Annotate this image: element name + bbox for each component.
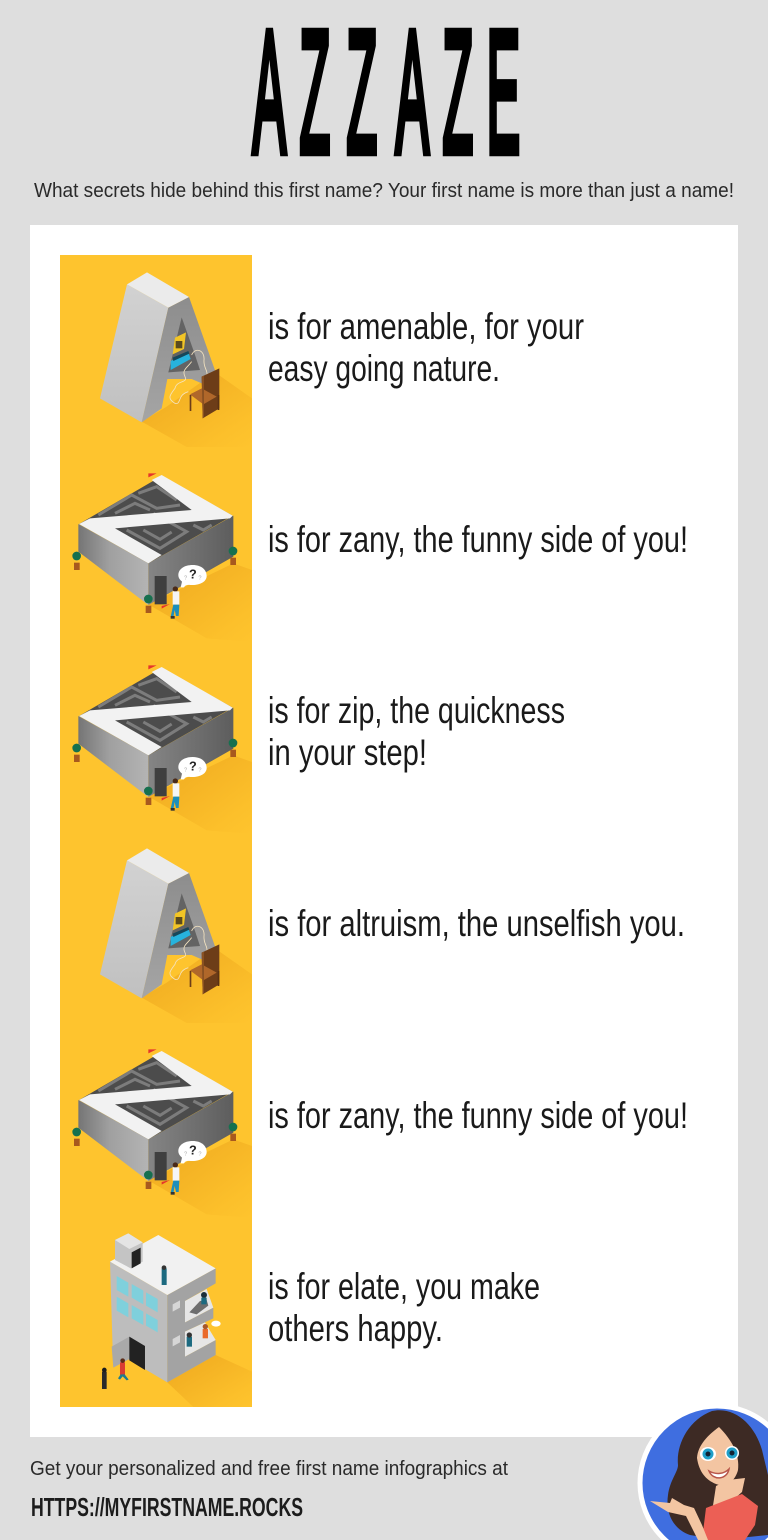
icon: isometric letter A with desk and chair [100,848,252,1023]
text: Z is for zip: is for zip, the quickness [268,690,565,731]
text: E is for elate [268,1266,540,1349]
text: A is for amenable [268,306,584,389]
yellow illustration strip [60,255,252,1407]
icon: isometric letter A with desk and chair [100,272,252,447]
text: A is for amenable: easy going nature. [268,348,500,389]
icon: isometric letter Z maze [72,1049,252,1218]
panel: white content card [30,225,738,1437]
subtitle: What secrets hide behind this first name? Your first name is more than just a name! [34,180,734,202]
icon: isometric letter E office building [102,1233,252,1407]
icon: isometric letter Z maze [72,665,252,834]
text: Z is for zip [268,690,565,773]
text: Z is for zip: in your step! [268,732,427,773]
footer URL: HTTPS://MYFIRSTNAME.ROCKS [31,1492,303,1522]
icon: isometric letter Z maze [72,473,252,642]
title: AZZAZE [253,0,520,188]
text: E is for elate: others happy. [268,1308,443,1349]
text: A is for amenable: is for amenable, for your [268,306,584,347]
text: E is for elate: is for elate, you make [268,1266,540,1307]
footer prompt text: Get your personalized and free first name infographics at [30,1458,508,1480]
avatar: cartoon woman in blue circle [640,1406,768,1540]
